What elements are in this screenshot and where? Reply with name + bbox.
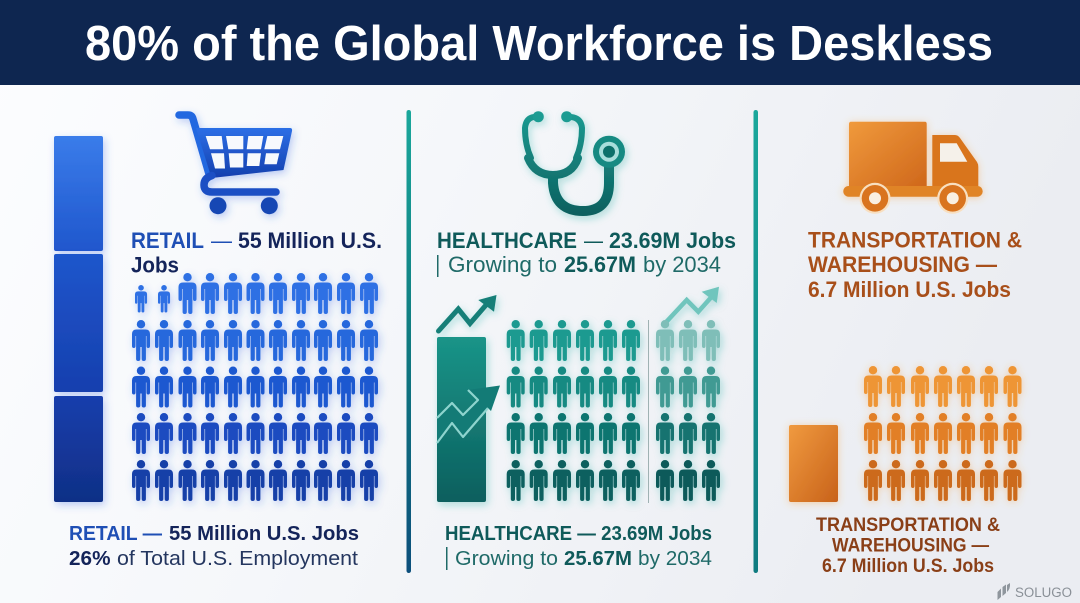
row 3 (864, 460, 1022, 501)
retail caption: of Total U.S. Employment (117, 547, 358, 570)
row 3 (132, 366, 378, 408)
row 1 projected (656, 320, 720, 361)
transportation people pictogram (864, 366, 1022, 501)
row 1 (135, 273, 378, 314)
header band (0, 0, 1080, 85)
panel: retail (54, 115, 382, 570)
retail heading: — (211, 228, 232, 253)
transportation heading: 6.7 Million U.S. Jobs (808, 277, 1011, 302)
panel: healthcare (437, 111, 736, 570)
logo: Solugo (998, 583, 1072, 600)
healthcare bar (437, 337, 486, 502)
healthcare heading (437, 228, 736, 277)
retail caption: 26% (69, 547, 110, 570)
row 2 (864, 413, 1022, 454)
title: 80% of the Global Workforce is Deskless (85, 17, 993, 71)
healthcare heading: 25.67M (564, 252, 636, 277)
row 2 current (507, 366, 640, 408)
row 3 projected (656, 413, 720, 454)
transportation heading: TRANSPORTATION & (808, 228, 1022, 253)
healthcare heading: by 2034 (643, 252, 721, 277)
row 2 projected (656, 366, 720, 408)
retail heading (131, 228, 382, 278)
healthcare caption: by 2034 (638, 547, 712, 570)
panel: transportation (789, 122, 1022, 577)
divider: right (754, 110, 758, 573)
row 4 projected (656, 460, 720, 501)
row 4 (132, 413, 378, 454)
healthcare heading: Growing to (448, 252, 557, 277)
healthcare heading: HEALTHCARE (437, 228, 577, 253)
transportation bar (789, 425, 838, 502)
arrow: projected growth (665, 287, 719, 323)
icon: stethoscope (525, 111, 625, 211)
transportation caption: 6.7 Million U.S. Jobs (822, 556, 994, 577)
healthcare heading: — (584, 228, 603, 253)
healthcare caption (445, 522, 712, 570)
retail caption (69, 522, 359, 570)
retail stacked bar (54, 136, 103, 502)
healthcare caption: 25.67M (564, 547, 632, 570)
retail caption: 55 Million U.S. Jobs (169, 522, 359, 545)
transportation heading (808, 228, 1022, 302)
icon: truck (843, 122, 983, 214)
row 2 (132, 320, 378, 361)
transportation heading: WAREHOUSING — (808, 252, 997, 277)
row 4 current (507, 460, 640, 501)
retail heading: Jobs (131, 252, 179, 278)
icon: shopping cart (179, 115, 292, 214)
arrow: growth on bar (437, 386, 500, 443)
transportation caption: WAREHOUSING — (832, 536, 989, 557)
retail heading: 55 Million U.S. (238, 228, 382, 253)
healthcare heading: 23.69M Jobs (609, 228, 736, 253)
row 1 current (507, 320, 640, 361)
logo: Solugo: SOLUGO (1015, 585, 1072, 600)
row 1 (864, 366, 1022, 407)
retail heading: RETAIL (131, 228, 204, 253)
retail people pictogram (132, 273, 378, 501)
healthcare caption: Growing to (455, 547, 558, 570)
transportation caption (816, 515, 1000, 577)
retail caption: RETAIL — (69, 522, 162, 545)
divider: left (406, 110, 411, 573)
healthcare people pictogram (507, 320, 720, 501)
healthcare caption: HEALTHCARE — 23.69M Jobs (445, 522, 712, 545)
transportation caption: TRANSPORTATION & (816, 515, 1000, 536)
row 5 (132, 460, 378, 501)
arrow: growth above bar (438, 295, 496, 331)
row 3 current (507, 413, 640, 454)
